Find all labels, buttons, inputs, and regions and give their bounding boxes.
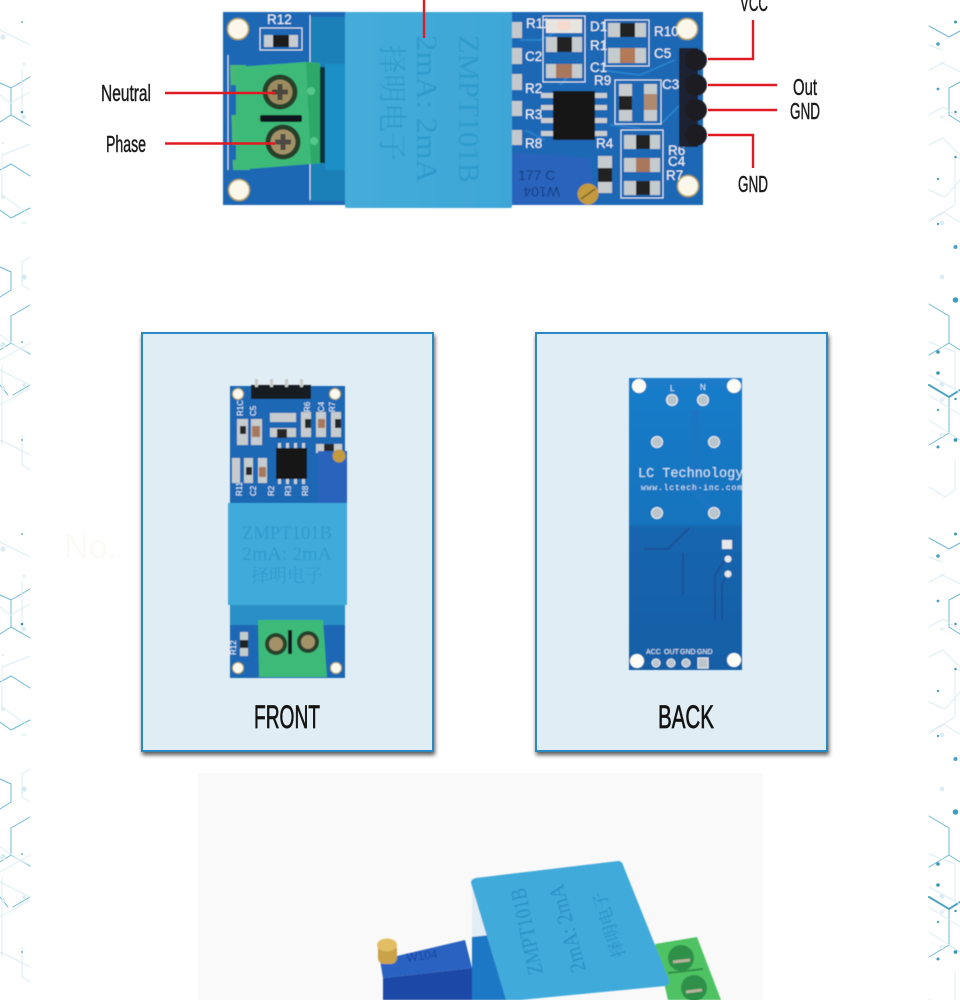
pin labels: Neutral: [101, 80, 151, 106]
trim pot: [318, 451, 347, 503]
pin labels: Out: [793, 74, 817, 100]
module photo: front: R2: [267, 485, 276, 496]
silkscreen labels: R12: [267, 12, 292, 27]
silkscreen labels: R9: [594, 73, 611, 88]
module photo: front: [228, 379, 347, 678]
silkscreen labels: R10: [654, 24, 679, 39]
right hexagon pattern: [929, 20, 960, 1000]
module photo: front: R1C: [236, 400, 245, 416]
transformer: 2mA: 2mA: [410, 35, 443, 183]
transformer: ZMPT101B: [452, 35, 485, 183]
pin labels: Phase: [106, 131, 146, 157]
silkscreen labels: C4: [668, 154, 686, 169]
green terminal: [655, 937, 721, 1000]
pin labels: [101, 0, 820, 197]
transformer: 择明电子: [589, 889, 629, 960]
silkscreen labels: R6: [668, 143, 685, 158]
pin header: [679, 48, 707, 147]
trim pot: W104: [405, 947, 439, 965]
silkscreen labels: D1: [590, 19, 607, 34]
module photo: front: C5: [249, 405, 258, 416]
module photo: back: [629, 378, 743, 670]
R12 resistor: [260, 28, 302, 50]
module photo: back: ACC: [646, 649, 661, 656]
transformer: ZMPT101B: [505, 886, 548, 977]
trim pot: [377, 938, 472, 1000]
panel: front view: [142, 333, 433, 751]
transformer: [345, 12, 512, 208]
left hexagon pattern: [0, 21, 30, 982]
module photo: front: R11: [235, 481, 244, 496]
silkscreen labels: R11: [526, 16, 550, 31]
module photo: back: OUT: [664, 649, 680, 656]
panel: back view: [536, 333, 827, 751]
photo: module top view pinout: [223, 12, 707, 208]
left pad column: [512, 22, 522, 145]
chip: [278, 443, 305, 484]
module photo: front: 择明电子: [251, 565, 323, 586]
panel background: [536, 333, 827, 751]
module photo: front: R7: [328, 401, 337, 412]
module photo: front: R6: [303, 401, 312, 412]
module photo: front: C2: [249, 485, 258, 496]
silkscreen labels: R7: [666, 168, 683, 183]
module photo: front: R3: [284, 485, 293, 496]
panel background: [142, 333, 433, 751]
callout lines: [165, 0, 777, 168]
silkscreen labels: C5: [654, 46, 671, 61]
silkscreen labels: C3: [662, 77, 679, 92]
potentiometer: W104: [523, 184, 560, 200]
module photo: back: GND: [680, 649, 696, 656]
R12 part: [240, 632, 248, 656]
transformer: 择明电子: [375, 45, 408, 161]
pin labels: GND: [790, 98, 820, 124]
potentiometer: 177 C: [518, 167, 555, 183]
transformer: 2mA: 2mA: [543, 882, 591, 975]
silkscreen labels: R1: [590, 38, 607, 53]
module photo: back: LC Technology: [638, 467, 743, 482]
pin labels: GND: [738, 171, 768, 197]
board: [223, 12, 703, 205]
mounting holes: [228, 18, 698, 200]
module photo: front: ZMPT101B: [242, 523, 332, 544]
silkscreen labels: R2: [525, 81, 542, 96]
caption: BACK: [658, 699, 714, 735]
op-amp chip: [541, 91, 607, 140]
module photo: front: C4: [317, 401, 326, 412]
photo: module perspective view: [198, 773, 763, 1000]
silkscreen labels: C2: [525, 49, 542, 64]
surface mount parts: [543, 16, 663, 198]
silkscreen labels: R4: [596, 136, 614, 151]
module photo: front: 2mA: 2mA: [242, 544, 332, 565]
terminal block: [258, 620, 327, 677]
faint watermark: No.: [64, 528, 117, 566]
transformer: [228, 503, 347, 605]
potentiometer: [512, 152, 598, 205]
green terminal block: [230, 62, 325, 170]
silkscreen labels: [267, 12, 686, 183]
silkscreen labels: R3: [525, 107, 542, 122]
module photo: front: R8: [301, 485, 310, 496]
module photo: front: R12: [229, 640, 238, 655]
transformer: [471, 861, 669, 1000]
silkscreen labels: C1: [590, 60, 607, 75]
module photo: back: www.lctech-inc.com: [641, 484, 742, 493]
module photo: back: L: [670, 384, 675, 393]
module photo: back: N: [700, 383, 706, 392]
silkscreen labels: R8: [525, 136, 542, 151]
module photo: back: GND: [697, 649, 713, 656]
caption: FRONT: [254, 699, 320, 735]
